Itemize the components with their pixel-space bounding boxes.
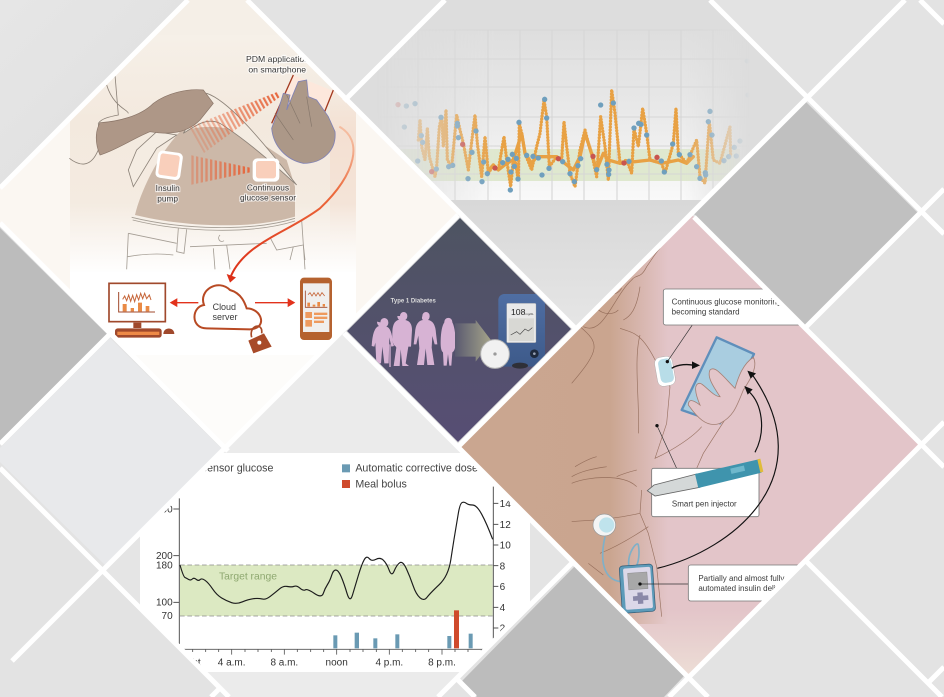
body outline — [572, 248, 733, 617]
right axis: 12 — [500, 520, 511, 531]
glucose sensor patch — [253, 158, 279, 182]
heading: Sensor glucose — [200, 463, 274, 475]
right axis: 2 — [500, 624, 506, 635]
smart pen — [647, 459, 763, 496]
left axis: 300 — [156, 504, 173, 515]
red readings — [395, 102, 660, 174]
panel: connected devices on patient — [455, 210, 925, 680]
labels on torso: glucose sensor — [240, 193, 296, 203]
arrows from cloud — [171, 299, 294, 306]
glucose reader device: 108 — [511, 307, 526, 317]
glucose reader device — [498, 294, 545, 369]
left arm — [96, 90, 213, 155]
arm sensor — [654, 355, 676, 387]
target band — [400, 149, 740, 181]
right axis: 8 — [500, 561, 506, 572]
callout: continuous glucose monitoring: becoming standard — [672, 307, 740, 316]
trousers outline — [127, 217, 305, 269]
people silhouettes — [372, 312, 456, 367]
arrow — [455, 320, 492, 362]
left axis: 100 — [156, 598, 173, 609]
right axis — [493, 487, 511, 638]
legend: Meal bolus — [355, 478, 407, 490]
right axis: 10 — [500, 541, 511, 552]
signal waves from phone — [189, 92, 281, 153]
pump screen dot — [638, 582, 642, 586]
callout: automated insulin delivery: Partially and almost fully — [698, 574, 784, 583]
right axis: 6 — [500, 582, 506, 593]
insulin pump patch — [155, 150, 183, 181]
callout: smart pen injector — [652, 468, 759, 517]
target range band: Target range — [219, 571, 277, 582]
sensor dot — [666, 360, 669, 363]
left axis: 180 — [156, 560, 173, 571]
time axis: 4 p.m. — [375, 657, 403, 668]
arrow: sensor to phone — [672, 361, 700, 369]
pump tubing loop — [629, 544, 639, 567]
handheld pump — [619, 564, 656, 613]
labels on torso: Insulin — [156, 183, 180, 193]
right axis: 14 — [500, 499, 511, 510]
cloud server icon: server — [213, 312, 237, 322]
glucose reader device: mg/dL — [525, 312, 534, 316]
callout: continuous glucose monitoring — [663, 289, 813, 325]
monitor icon — [109, 283, 174, 338]
cloud server icon: Cloud — [213, 302, 236, 312]
leader line: pump to callout — [640, 583, 688, 585]
legend: Automatic corrective doses — [355, 463, 483, 475]
callout: automated insulin delivery: automated insulin delivery — [698, 584, 791, 593]
labels on torso: on smartphone — [248, 65, 306, 75]
time axis: 4 a.m. — [218, 657, 246, 668]
smartphone icon — [300, 278, 332, 340]
blue readings — [402, 96, 742, 193]
time axis: 8 a.m. — [270, 657, 298, 668]
right hand — [272, 80, 335, 163]
smartphone in hand — [682, 337, 755, 425]
lock icon — [248, 326, 272, 353]
torso — [135, 127, 295, 225]
callout: smart pen injector: Smart pen injector — [672, 500, 737, 509]
time axis: Midnight — [163, 657, 201, 668]
panel: sensor glucose chart — [102, 330, 580, 697]
arrow: pump to phone — [657, 371, 778, 568]
sensor disc — [481, 340, 509, 368]
labels on torso: pump — [157, 194, 178, 204]
phone with PDM — [272, 75, 335, 123]
labels on torso: Continuous — [247, 182, 289, 192]
left axis: 70 — [162, 611, 173, 622]
time axis: noon — [326, 657, 348, 668]
leader line: pen to callout — [657, 426, 677, 468]
glucose trace — [418, 90, 731, 187]
panel: type 1 diabetes — [347, 218, 571, 442]
legend — [342, 463, 483, 490]
left axis: 200 — [156, 551, 173, 562]
signal waves from sensor — [190, 155, 252, 185]
injection site dot — [655, 424, 659, 427]
leader line: sensor to callout — [667, 325, 692, 362]
arrow: pen to phone — [744, 386, 762, 452]
target range band — [180, 565, 493, 616]
right axis: 4 — [500, 603, 506, 614]
shirt folds — [69, 75, 297, 187]
labels on torso — [156, 54, 309, 204]
heading: Type 1 Diabetes — [391, 299, 436, 305]
panel: glucose scatter chart — [395, 30, 749, 228]
grid — [414, 30, 728, 200]
time axis: 8 p.m. — [428, 657, 456, 668]
glucose curve — [180, 502, 493, 603]
infusion site — [593, 514, 623, 582]
callout: continuous glucose monitoring: Continuous glucose monitoring — [672, 297, 781, 306]
labels on torso: PDM application — [246, 54, 309, 64]
callout: automated insulin delivery — [688, 565, 828, 601]
left axis — [156, 498, 179, 644]
dose bars — [333, 610, 473, 648]
panel: insulin pump and cloud system — [0, 0, 470, 460]
red arrow to cloud — [227, 127, 353, 283]
cloud server icon — [194, 285, 261, 329]
time axis — [163, 649, 483, 668]
